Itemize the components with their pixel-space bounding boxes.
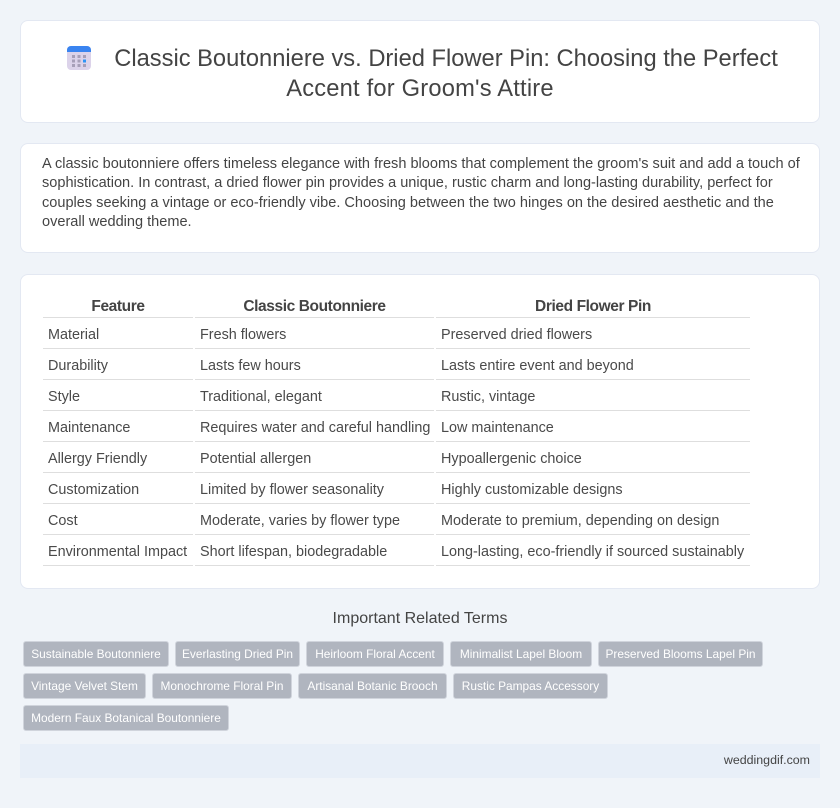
comparison table: Potential allergen <box>200 451 311 467</box>
comparison table: Hypoallergenic choice <box>441 451 582 467</box>
related term tags: Preserved Blooms Lapel Pin <box>605 647 756 661</box>
comparison table: Material <box>48 327 99 343</box>
comparison table: Moderate, varies by flower type <box>200 513 400 529</box>
title: Classic Boutonniere vs. Dried Flower Pin: Choosing the Perfect <box>114 46 778 72</box>
comparison table: Preserved dried flowers <box>441 327 592 343</box>
comparison table: Requires water and careful handling <box>200 420 430 436</box>
comparison table: Lasts entire event and beyond <box>441 358 634 374</box>
comparison table: Allergy Friendly <box>48 451 147 467</box>
comparison table: Traditional, elegant <box>200 389 322 405</box>
related term tags: Vintage Velvet Stem <box>31 679 138 693</box>
comparison table: Rustic, vintage <box>441 389 535 405</box>
related term tags: Artisanal Botanic Brooch <box>307 679 438 693</box>
panel: header card <box>20 20 820 123</box>
panel: comparison table card <box>20 274 820 589</box>
comparison table: Limited by flower seasonality <box>200 482 384 498</box>
comparison table: Classic Boutonniere <box>243 298 386 315</box>
related term tags: Rustic Pampas Accessory <box>462 679 599 693</box>
comparison table: Dried Flower Pin <box>535 298 651 315</box>
comparison table: Cost <box>48 513 78 529</box>
related term tags: Heirloom Floral Accent <box>315 647 435 661</box>
comparison table: Low maintenance <box>441 420 554 436</box>
related term tags: Everlasting Dried Pin <box>182 647 293 661</box>
title <box>114 46 778 102</box>
related terms heading: Important Related Terms <box>333 610 507 627</box>
related term tags: Minimalist Lapel Bloom <box>460 647 582 661</box>
comparison table: Fresh flowers <box>200 327 286 343</box>
comparison table: Long-lasting, eco-friendly if sourced sustainably <box>441 544 744 560</box>
description text <box>42 156 800 230</box>
comparison table: Customization <box>48 482 139 498</box>
comparison table: Short lifespan, biodegradable <box>200 544 387 560</box>
description text: couples seeking a vintage or eco-friendly vibe. Choosing between the two hinges on the desired aesthetic and the <box>42 195 774 211</box>
description text: sophistication. In contrast, a dried flower pin provides a unique, rustic charm and long-lasting durability, perfect for <box>42 175 773 191</box>
related term tags: Monochrome Floral Pin <box>161 679 283 693</box>
description text: A classic boutonniere offers timeless elegance with fresh blooms that complement the groom's suit and add a touch of <box>42 156 800 172</box>
related term tags: Sustainable Boutonniere <box>31 647 161 661</box>
footer source: weddingdif.com <box>724 753 810 767</box>
related term tags: Modern Faux Botanical Boutonniere <box>31 711 221 725</box>
comparison table: Style <box>48 389 80 405</box>
comparison table: Highly customizable designs <box>441 482 623 498</box>
comparison table: Durability <box>48 358 108 374</box>
footer bar <box>20 744 820 778</box>
icon: calendar <box>67 46 91 70</box>
description text: overall wedding theme. <box>42 214 192 230</box>
comparison table: Moderate to premium, depending on design <box>441 513 719 529</box>
panel: description card <box>20 143 820 253</box>
comparison table: Feature <box>91 298 145 315</box>
title: Accent for Groom's Attire <box>286 76 554 102</box>
comparison table: Lasts few hours <box>200 358 301 374</box>
comparison table: Maintenance <box>48 420 130 436</box>
comparison table: Environmental Impact <box>48 544 187 560</box>
